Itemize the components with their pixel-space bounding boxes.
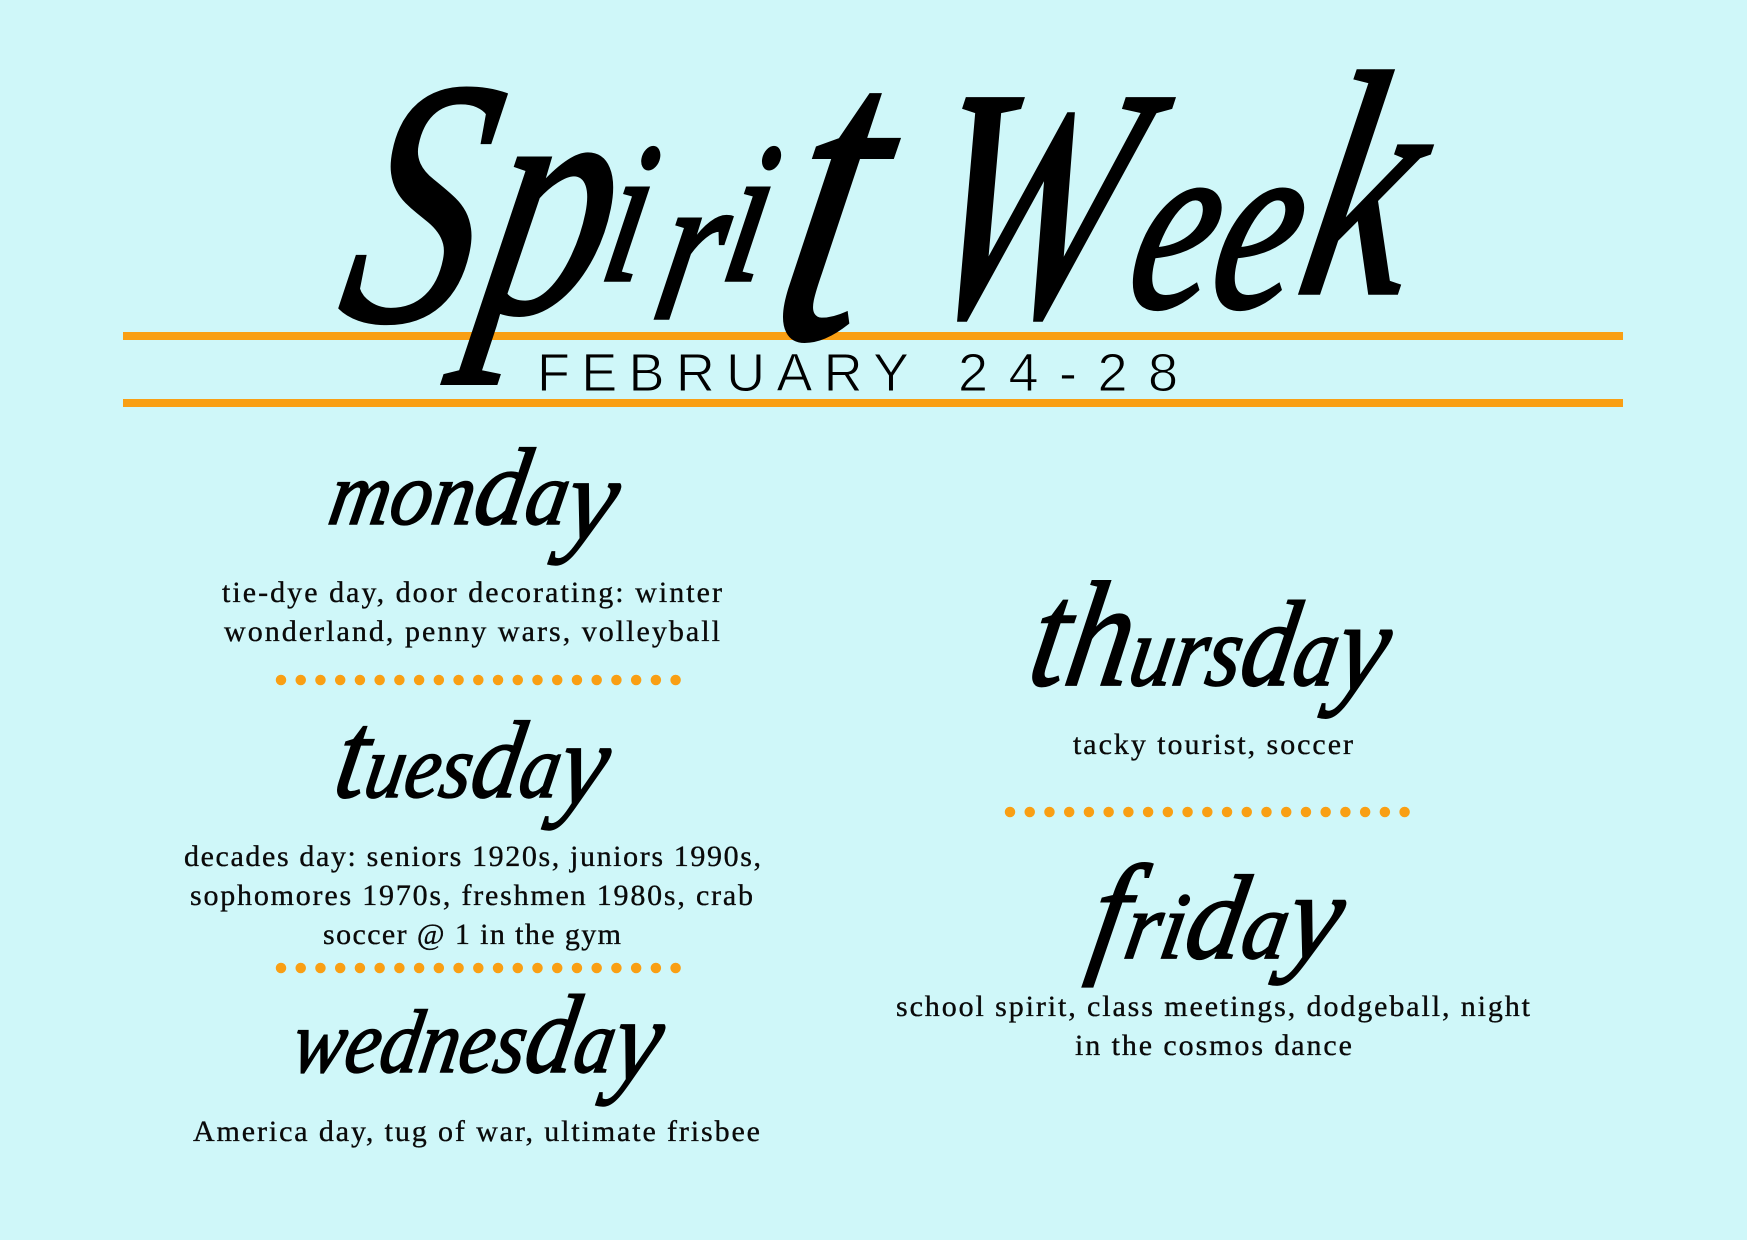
heading: friday: frida (1081, 839, 1301, 988)
dotted divider: tuesday and wednesday (281, 963, 677, 973)
dotted divider: thursday and friday (1010, 807, 1410, 817)
text: friday events: school spirit, class meetings, dodgeball, night (896, 990, 1531, 1023)
text: thursday events: tacky tourist, soccer (1073, 728, 1353, 761)
heading: friday: y (1268, 848, 1356, 986)
orange rule below date (123, 399, 1623, 407)
title: k (1279, 8, 1462, 362)
title: r (640, 127, 751, 365)
heading: monday: y (547, 433, 630, 566)
title: S (319, 8, 528, 396)
heading: monday: monda (323, 426, 581, 548)
text: monday events: wonderland, penny wars, volleyball (224, 615, 720, 648)
text: monday events: tie-dye day, door decorating: winter (222, 576, 722, 609)
title: p (440, 14, 656, 385)
date subtitle: 24-28 (958, 343, 1178, 403)
text: tuesday events: sophomores 1970s, freshmen 1980s, crab (190, 879, 753, 912)
heading: thursday: y (1318, 575, 1403, 719)
text: friday events: in the cosmos dance (1075, 1029, 1352, 1062)
heading: wednesday: wednesda (286, 973, 630, 1097)
date subtitle: FEBRUARY (537, 343, 908, 403)
text: tuesday events: decades day: seniors 1920s, juniors 1990s, (184, 840, 761, 873)
text: tuesday events: soccer @ 1 in the gym (323, 918, 621, 951)
dotted divider: monday and tuesday (281, 675, 677, 685)
heading: thursday: thursda (1019, 551, 1355, 718)
orange rule above date (123, 332, 1623, 340)
heading: wednesday: y (595, 974, 675, 1107)
text: wednesday events: America day, tug of war, ultimate frisbee (193, 1115, 760, 1148)
heading: tuesday: y (540, 698, 621, 831)
title: W (892, 21, 1193, 386)
title: i (709, 101, 795, 324)
title: i (589, 101, 675, 324)
title: e (1194, 86, 1332, 362)
heading: tuesday: tuesda (326, 687, 575, 825)
title: e (1111, 86, 1250, 362)
